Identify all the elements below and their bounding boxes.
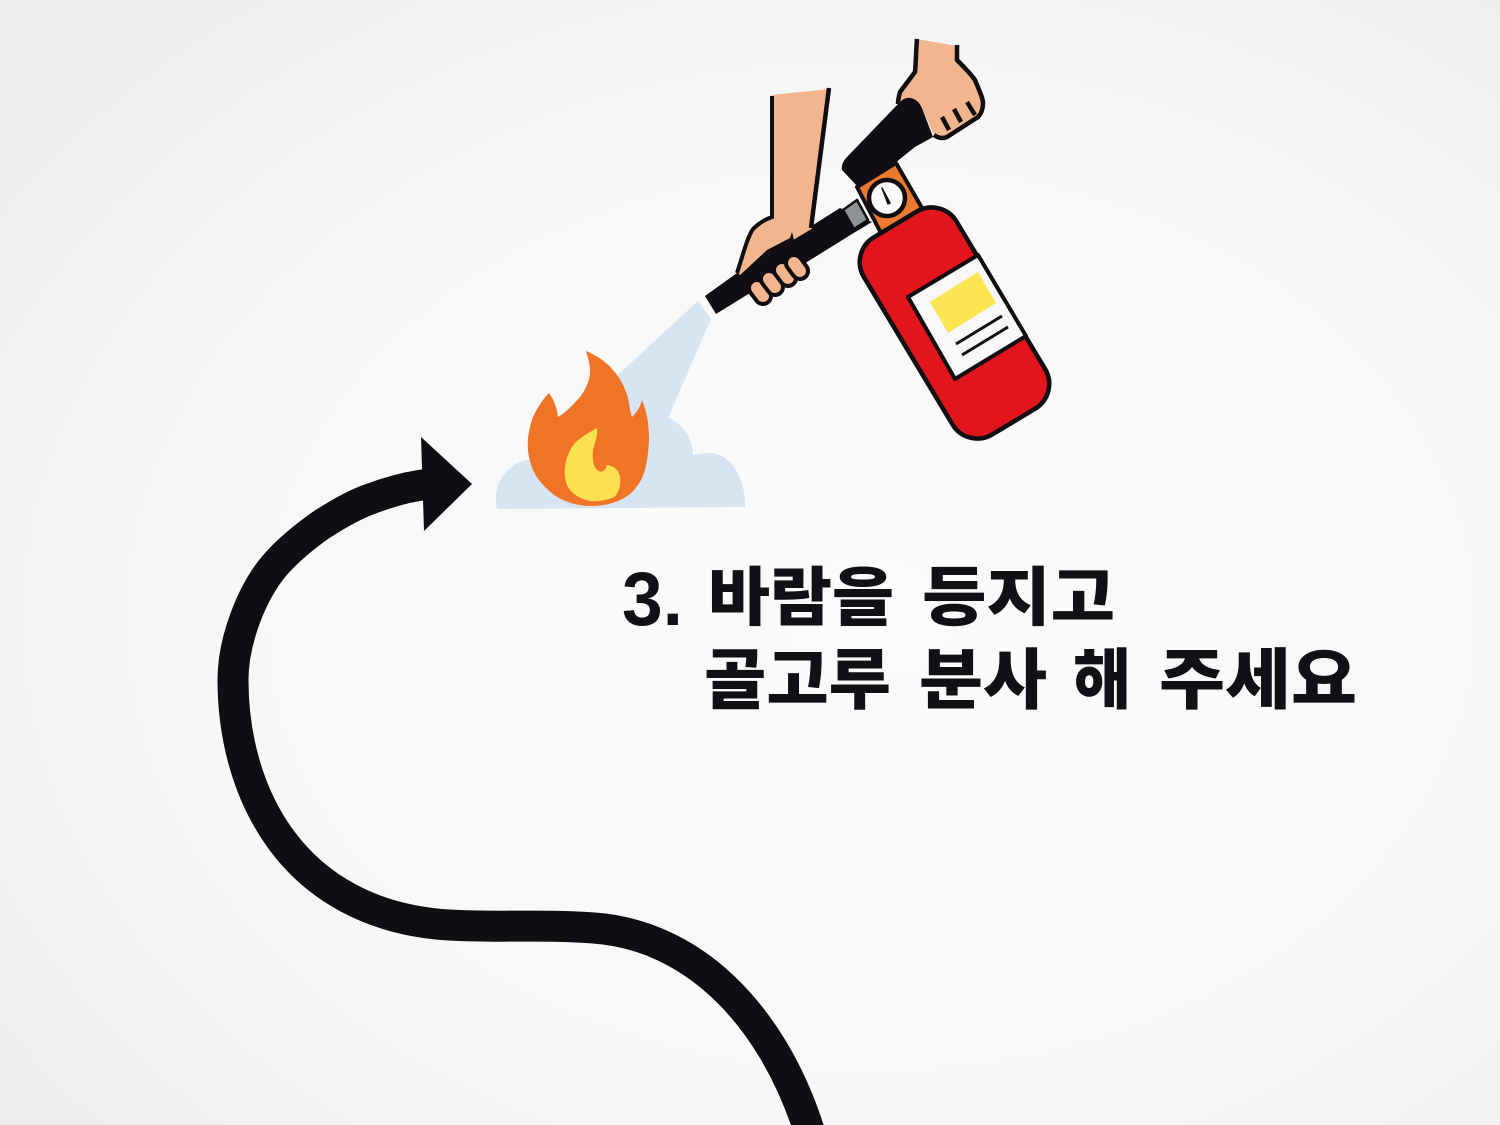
line 1: 등지고 (922, 547, 1115, 639)
instruction label (908, 255, 1026, 379)
line 2: 분사 (919, 627, 1047, 723)
line 1: 바람을 (708, 547, 894, 639)
flame (528, 351, 649, 506)
neck with pressure gauge (857, 163, 922, 235)
instruction text (622, 547, 1357, 723)
red cylinder body (849, 197, 1060, 449)
fire extinguisher (705, 163, 1060, 449)
grey hose coupling (843, 200, 868, 229)
fingers (746, 252, 811, 307)
line 2 (704, 627, 1357, 723)
spray and extinguishing cloud (496, 301, 745, 509)
line 2: 골고루 (704, 627, 891, 723)
line 1 (622, 547, 1115, 642)
line 1: 3. (622, 557, 683, 642)
line 2: 주세요 (1159, 627, 1357, 723)
curved direction arrow (233, 437, 809, 1125)
line 2: 해 (1073, 627, 1131, 723)
right hand on handle (842, 39, 983, 187)
left arm gripping hose (737, 88, 829, 307)
hose and nozzle (705, 208, 872, 314)
